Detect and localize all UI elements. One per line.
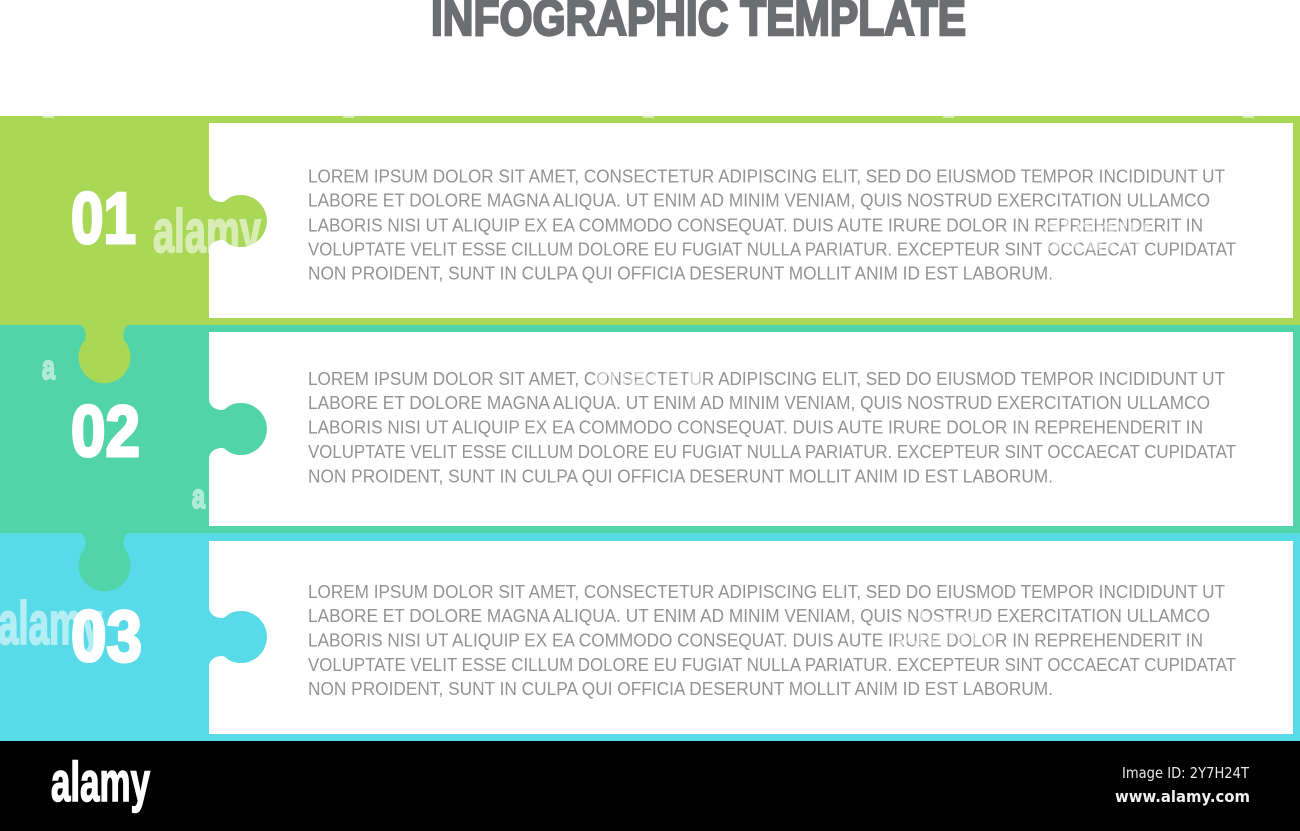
- puzzle tab: right 02: [205, 400, 267, 458]
- text box 02: [209, 332, 1293, 526]
- watermark: alamy on tab: alamy: [153, 198, 261, 265]
- panel background: green: [0, 116, 1300, 325]
- text box 01: [209, 123, 1293, 318]
- body text 01: LABORIS NISI UT ALIQUIP EX EA COMMODO CONSEQUAT. DUIS AUTE IRURE DOLOR IN REPREHENDERIT IN: [308, 216, 1203, 236]
- body text 02: NON PROIDENT, SUNT IN CULPA QUI OFFICIA DESERUNT MOLLIT ANIM ID EST LABORUM.: [308, 466, 1053, 486]
- body text 03: VOLUPTATE VELIT ESSE CILLUM DOLORE EU FUGIAT NULLA PARIATUR. EXCEPTEUR SINT OCCAECAT CUPIDATAT: [308, 655, 1236, 675]
- body text 01: NON PROIDENT, SUNT IN CULPA QUI OFFICIA DESERUNT MOLLIT ANIM ID EST LABORUM.: [308, 264, 1053, 284]
- body text 03: [308, 582, 1236, 699]
- panel: step 02: [0, 325, 1300, 591]
- text box 03: [209, 541, 1293, 734]
- panel background: cyan: [0, 533, 1300, 741]
- panel: step 03: [0, 533, 1300, 741]
- body text 03: NON PROIDENT, SUNT IN CULPA QUI OFFICIA DESERUNT MOLLIT ANIM ID EST LABORUM.: [308, 679, 1053, 699]
- website: www.alamy.com: [1115, 787, 1250, 806]
- image id: Image ID: 2Y7H24T: [1122, 764, 1250, 782]
- step number 01: 01: [71, 179, 136, 259]
- body text 02: LABORIS NISI UT ALIQUIP EX EA COMMODO CONSEQUAT. DUIS AUTE IRURE DOLOR IN REPREHENDERIT IN: [308, 418, 1203, 438]
- faint watermark over text 03: alamy: [895, 599, 1000, 657]
- body text 02: LOREM IPSUM DOLOR SIT AMET, CONSECTETUR ADIPISCING ELIT, SED DO EIUSMOD TEMPOR INCIDIDUNT UT: [308, 369, 1225, 389]
- body text 03: LABORIS NISI UT ALIQUIP EX EA COMMODO CONSEQUAT. DUIS AUTE IRURE DOLOR IN REPREHENDERIT IN: [308, 630, 1203, 650]
- footer logo: alamy: alamy: [51, 750, 150, 813]
- body text 03: LOREM IPSUM DOLOR SIT AMET, CONSECTETUR ADIPISCING ELIT, SED DO EIUSMOD TEMPOR INCIDIDUNT UT: [308, 582, 1225, 602]
- footer background: [0, 741, 1300, 831]
- puzzle tab: down into 02: [79, 325, 130, 383]
- puzzle tab: down into 03: [79, 533, 130, 591]
- body text 02: LABORE ET DOLORE MAGNA ALIQUA. UT ENIM AD MINIM VENIAM, QUIS NOSTRUD EXERCITATION ULLAMCO: [308, 393, 1210, 413]
- puzzle tab: right 03: [205, 608, 267, 666]
- panel: step 01: [0, 116, 1300, 383]
- faint watermark over text 01: alamy: [1040, 204, 1150, 262]
- tiny watermark marks on top edge: [43, 116, 1254, 118]
- body text 01: VOLUPTATE VELIT ESSE CILLUM DOLORE EU FUGIAT NULLA PARIATUR. EXCEPTEUR SINT OCCAECAT CUPIDATAT: [308, 240, 1236, 260]
- step number 03: 03: [71, 597, 142, 677]
- body text 01: LABORE ET DOLORE MAGNA ALIQUA. UT ENIM AD MINIM VENIAM, QUIS NOSTRUD EXERCITATION ULLAMCO: [308, 190, 1210, 210]
- body text 03: LABORE ET DOLORE MAGNA ALIQUA. UT ENIM AD MINIM VENIAM, QUIS NOSTRUD EXERCITATION ULLAMCO: [308, 606, 1210, 626]
- body text 02: VOLUPTATE VELIT ESSE CILLUM DOLORE EU FUGIAT NULLA PARIATUR. EXCEPTEUR SINT OCCAECAT CUPIDATAT: [308, 442, 1236, 462]
- step number 02: 02: [71, 392, 140, 472]
- body text 01: [308, 166, 1236, 284]
- watermark: alamy left: alamy: [0, 590, 102, 657]
- faint watermark over text 02: alamy: [596, 342, 706, 400]
- watermark: letter a lower: a: [192, 478, 206, 516]
- watermark: letter a upper: a: [42, 349, 56, 387]
- body text 01: LOREM IPSUM DOLOR SIT AMET, CONSECTETUR ADIPISCING ELIT, SED DO EIUSMOD TEMPOR INCIDIDUNT UT: [308, 166, 1225, 186]
- body text 02: [308, 369, 1236, 486]
- panel background: teal: [0, 325, 1300, 533]
- puzzle tab: right 01: [205, 192, 267, 250]
- footer band: [0, 741, 1300, 831]
